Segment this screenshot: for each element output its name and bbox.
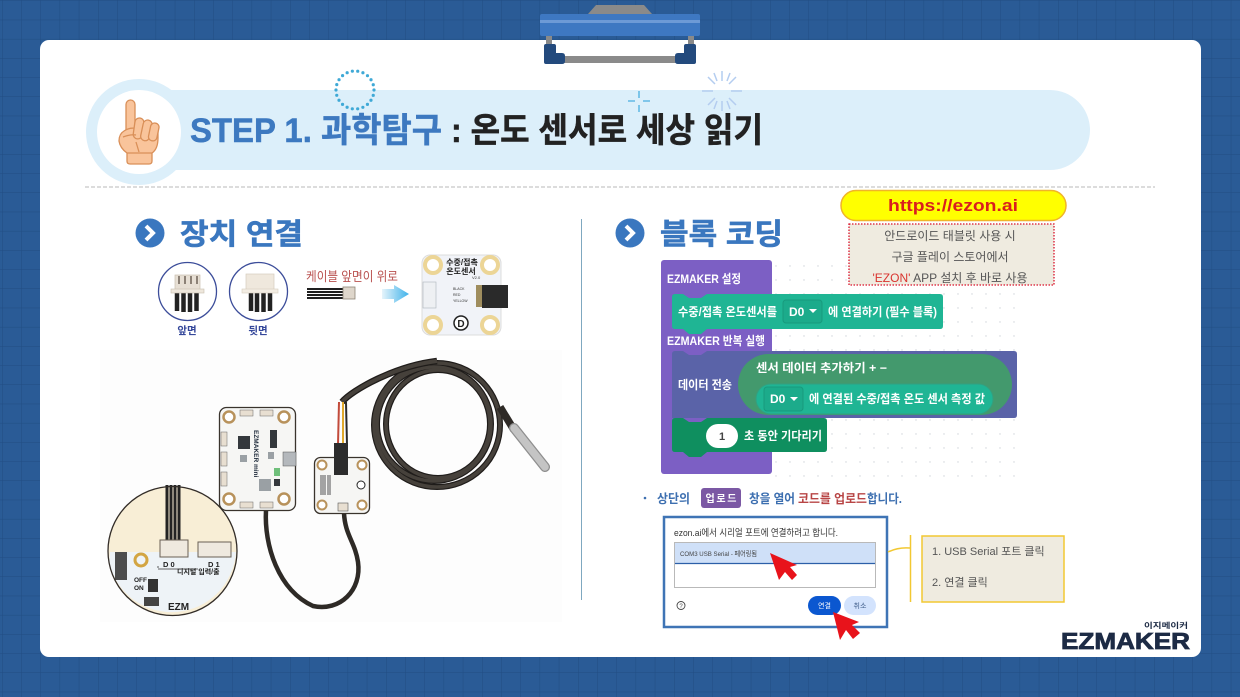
code blocks [661,260,1017,474]
block: wait: 초 동안 기다리기 [744,428,822,443]
callout: steps: 1. USB Serial 포트 클릭 [932,545,1045,558]
help icon: ? [679,604,683,610]
icon: pointing hand [119,100,160,164]
dialog: serial port: ezon.ai에서 시리얼 포트에 연결하려고 합니다. [674,527,838,539]
detail labels: OFF [134,577,147,584]
leader line [888,535,910,602]
sensor module: V2.0 [472,275,481,280]
arrow [382,285,409,303]
instruction: upload: 코드를 업로드 [798,492,867,506]
instruction: upload [644,488,902,508]
block: connect sensor [672,294,943,334]
block: connect sensor: 에 연결하기 (필수 블록) [828,304,937,319]
block: connect sensor: 수중/접촉 온도센서를 [678,305,777,319]
instruction: upload: 창을 열어 [749,491,795,506]
connector front view [158,262,216,337]
icon: clipboard clip [540,5,700,64]
pill: measured value: D0 [770,392,786,406]
section: block coding heading [616,218,783,251]
caption: cable front up: 케이블 앞면이 위로 [306,269,398,284]
button: connect: 연결 [818,601,831,610]
arrow: red cursor port [770,553,797,580]
button: cancel [844,596,876,615]
icon: sparkle cross [628,91,650,112]
note: android tablet: 'EZON' APP 설치 후 바로 사용 [872,271,1028,285]
upload button: 업로드 [706,492,736,505]
icon: hand circle [86,79,192,185]
sensor module [422,255,508,335]
block: wait [672,418,827,457]
block: data send [672,351,1017,418]
block: EZMAKER hat: EZMAKER 설정 [667,272,741,286]
instruction: upload: 합니다. [867,491,902,506]
icon: dotted circle [336,71,374,109]
logo: EZMAKER: 이지메이커 [1144,620,1188,630]
icon: chevron circle [136,218,164,248]
sensor module: BLACK [453,287,465,291]
pill: measured value: 에 연결된 수중/접촉 온도 센서 측정 값 [809,392,985,406]
module text: 수중/접촉 [446,257,478,267]
detail labels: D 1 [208,560,220,569]
section: device connection heading: 장치 연결 [180,218,303,251]
photo: hardware wiring [100,350,562,622]
heading: title: : 온도 센서로 세상 읽기 [451,112,763,150]
detail labels: ON [134,585,144,592]
heading: title: STEP 1. 과학탐구 [190,112,442,150]
board name: EZMAKER mini [252,430,259,478]
block: wait: 1 [719,431,725,443]
sensor module: 온도센서 [446,266,476,276]
URL pill: https://ezon.ai [888,196,1018,215]
logo: EZMAKER [1061,620,1190,654]
help icon [677,602,685,610]
note: android tablet: 구글 플레이 스토어에서 [891,250,1009,264]
logo: EZMAKER: EZMAKER [1061,628,1190,654]
sensor module: D [457,319,465,330]
upload button [701,488,741,508]
note: android tablet: 안드로이드 태블릿 사용 시 [884,229,1016,243]
detail labels: EZM [168,602,189,613]
sensor probe cable [338,361,545,487]
label: front: 앞면 [177,324,197,337]
icon: chevron circle [616,218,644,248]
port list [674,542,876,588]
dialog: serial port [664,517,887,627]
EZMAKER mini board [220,408,296,510]
button: connect [808,596,841,615]
extension cable [266,510,358,607]
button: cancel: 취소 [854,602,867,610]
workspace dot grid [775,265,1025,483]
label: back: 뒷면 [248,325,268,337]
zoom circle: connector detail [108,485,237,616]
sensor board [314,443,370,514]
callout: steps [922,536,1064,602]
block: connect sensor: D0 [789,305,805,319]
block: EZMAKER hat: EZMAKER 반복 실행 [667,333,765,348]
callout: steps: 2. 연결 클릭 [932,576,988,589]
note: android tablet [849,224,1054,285]
cable [307,287,355,299]
pill: measured value [756,384,993,414]
block: EZMAKER hat [661,260,772,474]
instruction: upload: 상단의 [657,492,690,506]
sensor module: RED [453,293,461,297]
connector back view [230,262,288,337]
arrow: red cursor connect [833,612,860,640]
detail labels: D 0 [163,560,175,569]
icon: burst [702,71,742,111]
section: block coding heading: 블록 코딩 [660,218,783,251]
detail labels: 디지털 입력/출 [177,567,220,576]
URL pill [841,190,1066,220]
block: data send: 데이터 전송 [678,378,732,392]
port list: COM3 USB Serial - 페어링됨 [680,549,757,558]
section: device connection heading [136,218,303,251]
heading band [86,79,1090,185]
pill: add sensor data [738,354,1012,415]
pill: add sensor data: 센서 데이터 추가하기 + − [756,360,887,375]
sensor module: YELLOW [453,299,468,303]
